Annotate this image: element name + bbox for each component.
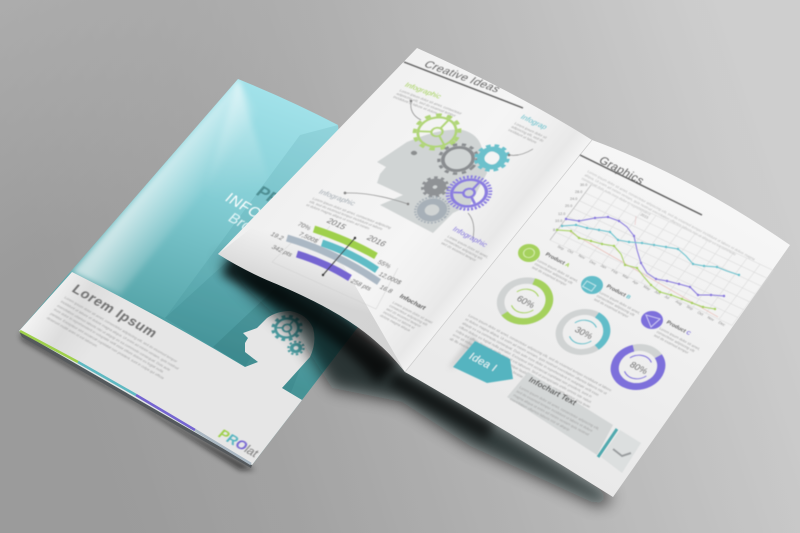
product c [641, 311, 701, 358]
brochure cover [19, 79, 358, 470]
series: teal [562, 225, 739, 275]
axis labels: Sep [685, 305, 694, 311]
infochart note [379, 293, 433, 337]
cover subtitle: Brochure [224, 210, 288, 253]
label: infographic grey: et dolore magna aliqua ut enim ad minim [305, 203, 370, 230]
donut: 30 percent [549, 304, 617, 360]
label: infographic teal: incididunt ut labore [507, 128, 538, 144]
heading: creative ideas: Creative Ideas [421, 60, 503, 95]
body paragraph: et dolore magna aliqua. Ut enim ad minim veniam, quis nostrud exercitation ullamco laboris nisi ut [464, 318, 608, 395]
infochart text box: Infochart Text [527, 376, 579, 407]
product c: Product C [665, 320, 692, 337]
label: infographic grey [305, 188, 392, 236]
axis labels: Apr [631, 280, 640, 286]
icon: teal gear [469, 141, 515, 175]
cover logo: PROlat [215, 426, 263, 460]
body paragraph: Lorem ipsum dolor sit amet, consectetur adipiscing elit, sed do eiusmod tempor incididunt ut labore [467, 314, 612, 392]
product c: consectetur adipiscing elit [656, 330, 695, 353]
axis labels: Nov [577, 254, 586, 260]
idea ribbon [449, 337, 513, 383]
line chart [550, 183, 773, 327]
icon: grey gear [418, 174, 452, 200]
infochart note: consectetur adipiscing elit [388, 304, 428, 327]
graphics intro text: Lorem ipsum dolor sit amet, consectetur adipiscing elit, sed do eiusmod tempor incididunt ut labore et dolore magna [586, 170, 757, 262]
infochart note: dolore magna aliqua [379, 314, 412, 333]
label: infographic teal: Infograp [519, 113, 550, 131]
label: infographic green: Infographic [403, 81, 444, 100]
infochart text box: exercitation ullamco laboris nisi ut aliquip [509, 397, 571, 432]
axis labels: 28.0 [575, 190, 582, 194]
eye dot [411, 151, 417, 155]
chart frame [272, 226, 398, 309]
infochart text box: magna aliqua ut enim ad minim veniam quis nostrud [512, 393, 590, 436]
donut: 80 percent: 80% [628, 360, 650, 376]
axis labels: Aug [674, 300, 683, 306]
label: infographic green: adipiscing elit, sed do eiusmod tempor [395, 92, 458, 118]
body paragraph: culpa qui officia deserunt mollit anim id est laborum. Sed ut perspiciatis unde omnis iste natus [455, 329, 592, 404]
cover body text: deserunt mollit anim id est laborum. [46, 316, 99, 348]
left page note: dolor sit amet [472, 305, 495, 318]
donut: 60 percent: 60% [515, 294, 537, 310]
chart values: 12,000$ [377, 271, 403, 286]
axis labels: Nov [706, 316, 715, 322]
year marker [635, 213, 649, 225]
axis labels: Jan [599, 264, 607, 270]
product a [518, 244, 579, 290]
product b: consectetur adipiscing elit [596, 294, 635, 317]
donut: 80 percent [594, 331, 682, 403]
chart values: 19.2 [269, 231, 285, 242]
chart values: 2015 [325, 216, 349, 231]
label: infographic purple: sed do eiusmod tempor [440, 241, 478, 262]
axis labels: 24.0 [570, 197, 577, 201]
axis labels: Dec [588, 260, 597, 266]
idea ribbon: Idea I [466, 351, 500, 374]
product a: sed do eiusmod tempor [531, 266, 568, 287]
chart values: 70% [296, 221, 313, 232]
checkbox [601, 430, 641, 473]
axis labels: Oct [566, 249, 575, 255]
chart values: 16.8 [378, 284, 394, 295]
label: infographic purple: consectetur adipiscing elit [443, 238, 483, 261]
axis labels: Mar [621, 274, 630, 280]
spread shadow [218, 256, 613, 506]
series: purple [566, 217, 724, 296]
chart values: 55% [376, 259, 393, 270]
body paragraph: error sit voluptatem accusantium doloremque laudantium, totam rem aperiam, eaque ipsa quae [452, 333, 591, 409]
bar chart [287, 229, 379, 282]
year marker: 2015 [639, 213, 649, 220]
icon: faded gear [408, 192, 456, 228]
left page: creative ideas [218, 48, 592, 372]
axis labels: 10.0 [555, 219, 562, 223]
axis labels: 30.0 [580, 183, 587, 187]
label: infographic teal: Lorem ipsum dolor sit [513, 122, 548, 140]
product b: Lorem ipsum dolor sit amet, [598, 291, 641, 315]
axis labels: Jun [653, 290, 661, 296]
axis labels: 8.0 [553, 228, 558, 232]
label: infographic purple [440, 225, 490, 265]
chart values: 2016 [365, 233, 389, 248]
chart values: 258 pts [349, 278, 374, 292]
head silhouette [377, 130, 487, 233]
icon: green gear [405, 108, 469, 156]
cover white panel [19, 272, 314, 465]
infochart note: incididunt ut labore et [382, 311, 416, 330]
axis labels: Oct [696, 311, 705, 317]
cover body text: Lorem ipsum dolor sit amet, consectetur adipiscing elit, sed do eiusmod tempor [63, 296, 179, 364]
axis labels: 12.0 [558, 212, 565, 216]
axis labels: Sep [556, 245, 565, 251]
axis labels [553, 183, 726, 327]
chart values [269, 216, 403, 295]
label: infographic grey: Infographic [317, 188, 358, 207]
label: infographic grey: Lorem ipsum dolor sit amet, consectetur adipiscing [311, 197, 392, 230]
label: infographic grey: elit, sed do eiusmod tempor incididunt ut labore [308, 200, 384, 231]
accent bar [598, 429, 617, 457]
body paragraph: ab illo inventore veritatis et quasi architecto beatae vitae dicta sunt explicabo nemo enim [449, 337, 579, 408]
heading: graphics [580, 155, 702, 215]
product a: consectetur adipiscing elit [534, 262, 573, 285]
label: infographic green [392, 81, 463, 122]
chart values: 342 pts [270, 244, 295, 258]
label: infographic purple: Infographic [451, 225, 490, 249]
icon: purple gear [439, 170, 499, 216]
cover title: PRO [252, 183, 297, 215]
right page: graphics [405, 140, 790, 497]
label: infographic green: incididunt ut labore et dolore [392, 95, 438, 115]
infochart note: Lorem ipsum dolor sit amet [391, 301, 433, 324]
product c: Lorem ipsum dolor sit amet, [658, 327, 701, 351]
product a: Product A [544, 252, 571, 269]
infochart text box: sed do eiusmod tempor incididunt ut labore et dolore [515, 390, 594, 433]
product b: Product B [605, 284, 632, 301]
icon: cover head gears [267, 312, 307, 357]
chart values: 7,500$ [297, 231, 320, 245]
cover heading: Lorem Ipsum [69, 281, 161, 340]
cover body text: pariatur. Excepteur sint occaecat cupidatat non proident, sunt in culpa qui officia [49, 312, 166, 381]
left page note: Lorem ipsum [475, 302, 497, 315]
cover body text [46, 296, 183, 387]
series: green [557, 230, 715, 309]
heading: creative ideas [404, 60, 523, 108]
cover body text: exercitation ullamco laboris nisi ut aliquip ex ea commodo consequat. Duis aute [56, 304, 171, 372]
label: infographic green: Lorem ipsum dolor sit amet, consectetur [398, 89, 463, 116]
label: infographic purple: Lorem ipsum dolor sit amet, [446, 235, 489, 259]
target line [570, 232, 718, 317]
axis labels: Feb [610, 269, 619, 275]
cover colour strip [20, 331, 251, 464]
cover body text: irure dolor in reprehenderit in voluptate velit esse cillum dolore eu fugiat nulla [53, 308, 165, 374]
body paragraph: cillum dolore eu fugiat nulla pariatur. Excepteur sint occaecat cupidatat non proident, sunt in [458, 325, 593, 399]
body paragraph [449, 314, 612, 416]
infochart text box [507, 372, 613, 455]
graphics intro text: aliqua. Ut enim ad minim veniam, quis nostrud exercitation ullamco laboris nisi ut aliquip ex ea commodo [583, 173, 737, 256]
heading: graphics: Graphics [596, 155, 646, 187]
axis labels: May [642, 285, 651, 291]
donut: 30 percent: 30% [573, 325, 595, 341]
product c: sed do eiusmod tempor [653, 334, 690, 355]
icon: dark gear [431, 139, 485, 179]
infochart text box: Lorem ipsum dolor sit amet, consectetur adipiscing elit, [518, 386, 600, 431]
graphics intro text: consequat duis aute irure dolor in reprehenderit [581, 177, 652, 216]
cover subtitle: INFOGRAPHIC [221, 190, 328, 258]
product b [581, 276, 641, 322]
axis labels: 20.0 [565, 204, 572, 208]
infochart note: Infochart [398, 293, 428, 312]
label: infographic teal: adipiscing elit, sed do [510, 125, 545, 143]
connector lines [344, 100, 533, 238]
body paragraph: aliquip ex ea commodo consequat. Duis aute irure dolor in reprehenderit in voluptate velit esse [461, 321, 600, 397]
label: infographic teal [507, 113, 550, 146]
axis labels: Jul [663, 295, 670, 300]
donut: 60 percent [484, 267, 566, 335]
product a: Lorem ipsum dolor sit amet, [536, 259, 579, 283]
infochart note: sed do eiusmod tempor [385, 307, 423, 328]
product b: sed do eiusmod tempor [593, 298, 630, 319]
axis labels: Dec [717, 321, 726, 327]
cover body text: incididunt ut labore et dolore magna aliqua. Ut enim ad minim veniam, quis nostrud [60, 300, 180, 370]
